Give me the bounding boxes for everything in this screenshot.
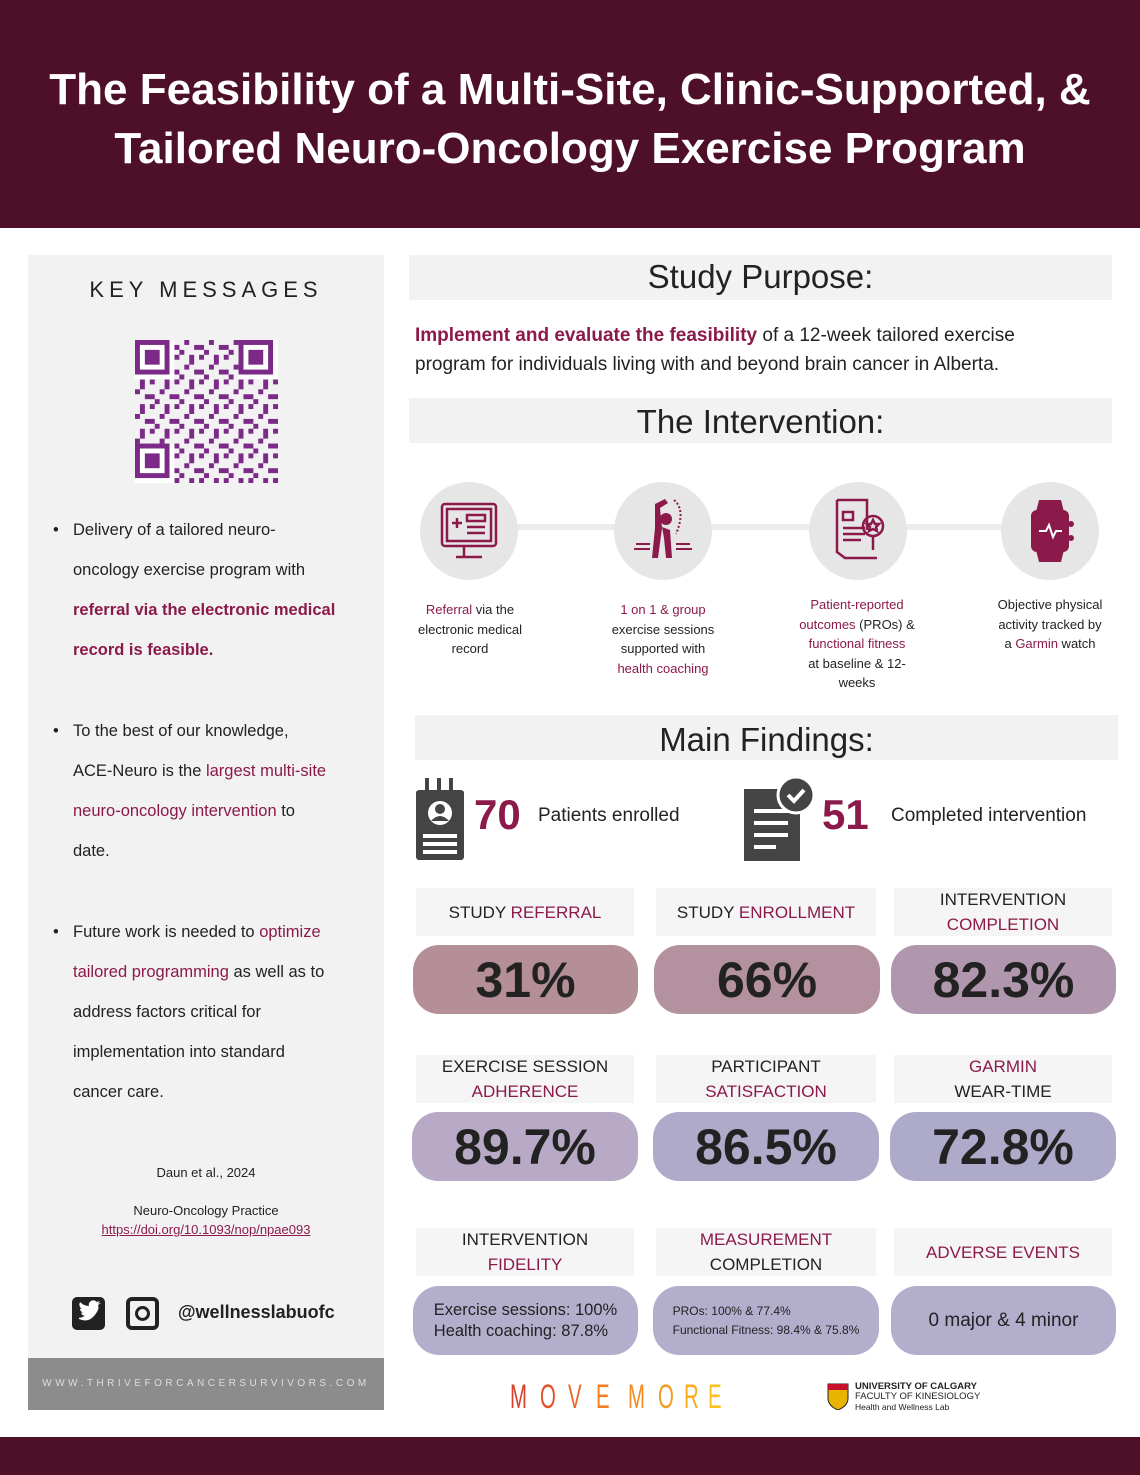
text: key messages list: To the best of our knowledge, xyxy=(73,722,289,740)
text: STUDY ENROLLMENT xyxy=(677,902,855,922)
text: key messages list: cancer care. xyxy=(73,1083,164,1101)
number 51: 51 xyxy=(822,791,869,838)
card headers row 3 xyxy=(416,1228,634,1276)
citation: Daun et al., 2024 xyxy=(156,1165,256,1180)
header banner: Tailored Neuro-Oncology Exercise Program xyxy=(114,124,1026,173)
pill: 82.3%: 82.3% xyxy=(933,952,1074,1008)
logo: university of calgary: UNIVERSITY OF CALGARY xyxy=(855,1381,977,1392)
text: sessions: 1 on 1 & group xyxy=(620,602,706,617)
text: key messages list xyxy=(53,521,335,1101)
text: PROs: at baseline & 12- xyxy=(808,656,906,670)
pill: measurement xyxy=(653,1286,879,1355)
text: garmin: activity tracked by xyxy=(998,616,1102,632)
text: SATISFACTION xyxy=(705,1082,827,1101)
pill: 86.5% xyxy=(653,1112,879,1181)
text: key messages list: Future work is needed to optimize xyxy=(73,923,321,941)
logo: university of calgary xyxy=(828,1381,980,1412)
stat: patients enrolled xyxy=(416,778,680,860)
logo: move more: O xyxy=(540,1378,556,1416)
text: INTERVENTION xyxy=(940,890,1066,909)
icon: monitor xyxy=(420,482,518,580)
icon: stretching person xyxy=(614,482,712,580)
handle: @wellnesslabuofc xyxy=(178,1302,335,1322)
text: ADVERSE EVENTS xyxy=(926,1242,1080,1262)
icon: watch xyxy=(1001,482,1099,580)
text: WEAR-TIME xyxy=(954,1082,1052,1101)
heading: main findings xyxy=(415,715,1118,760)
text: key messages list: Delivery of a tailored neuro- xyxy=(73,521,276,539)
text: sessions xyxy=(612,602,714,676)
pill: fidelity xyxy=(413,1286,638,1355)
text: key messages list: • xyxy=(53,521,59,539)
text: key messages list: implementation into standard xyxy=(73,1043,285,1061)
website bar xyxy=(28,1358,384,1410)
card headers row 1 xyxy=(416,888,634,936)
text: key messages list: referral via the electronic medical xyxy=(73,601,335,619)
pill: fidelity: Health coaching: 87.8% xyxy=(434,1322,608,1340)
text: key messages list: record is feasible. xyxy=(73,641,213,659)
pill: 89.7%: 89.7% xyxy=(454,1118,596,1174)
number 70: 70 xyxy=(474,791,521,838)
logo: move more: R xyxy=(684,1378,699,1416)
pill: fidelity: Exercise sessions: 100% xyxy=(434,1300,617,1318)
text: key messages list: ACE-Neuro is the largest multi-site xyxy=(73,762,326,780)
text: study purpose: Implement and evaluate the feasibility of a 12-week tailored exercise xyxy=(415,325,1015,346)
logo: university of calgary: FACULTY OF KINESIOLOGY xyxy=(855,1391,980,1402)
text: garmin: a Garmin watch xyxy=(1004,636,1096,651)
pill: 89.7% xyxy=(412,1112,638,1181)
text: sessions: supported with xyxy=(621,641,705,656)
logo: move more: E xyxy=(708,1378,722,1416)
text: GARMIN xyxy=(969,1057,1037,1076)
logo: university of calgary: Health and Wellness Lab xyxy=(855,1402,949,1412)
text: key messages list: address factors critical for xyxy=(73,1003,261,1021)
stat: patients enrolled: Patients enrolled xyxy=(538,805,680,826)
connector line xyxy=(470,524,1050,530)
pill: 72.8% xyxy=(890,1112,1116,1181)
icon: QR code xyxy=(135,340,278,483)
card headers row 2: EXERCISE SESSION xyxy=(442,1057,608,1076)
text: sessions: health coaching xyxy=(617,660,709,676)
pill: 66%: 66% xyxy=(717,952,817,1008)
text: key messages list: • xyxy=(53,722,59,740)
header banner xyxy=(0,0,1140,228)
icon: instagram xyxy=(126,1297,159,1330)
logo: move more: O xyxy=(658,1378,674,1416)
card headers row 3: INTERVENTION xyxy=(462,1230,588,1249)
icon: document with magnifier xyxy=(809,482,907,580)
text: PROs: outcomes (PROs) & xyxy=(799,616,915,632)
text: PROs: Patient-reported xyxy=(810,597,904,612)
text: study purpose: program for individuals living with and beyond brain cancer in Alberta. xyxy=(415,354,999,375)
citation: https://doi.org/10.1093/nop/npae093 xyxy=(102,1222,310,1237)
pill: 82.3% xyxy=(891,945,1116,1014)
pill: 31% xyxy=(413,945,638,1014)
text: COMPLETION xyxy=(947,915,1059,934)
stat: completed intervention: Completed intervention xyxy=(891,805,1086,826)
logo: move more: E xyxy=(596,1378,610,1416)
pill: 66% xyxy=(654,945,880,1014)
website bar: WWW.THRIVEFORCANCERSURVIVORS.COM xyxy=(42,1378,370,1389)
logo: move more: M xyxy=(628,1378,645,1416)
text: key messages list: oncology exercise program with xyxy=(73,561,305,579)
text: study purpose xyxy=(415,325,1015,375)
text: key messages list: • xyxy=(53,923,59,941)
text: sessions: exercise sessions xyxy=(612,622,714,636)
pill: 72.8%: 72.8% xyxy=(932,1118,1074,1174)
logo: move more: M xyxy=(510,1378,527,1416)
icon: twitter xyxy=(72,1297,105,1330)
pill: 86.5%: 86.5% xyxy=(695,1118,837,1174)
heading: main findings: Main Findings: xyxy=(659,721,874,758)
pill: measurement: Functional Fitness: 98.4% & 75.8% xyxy=(673,1322,859,1336)
footer bar xyxy=(0,1437,1140,1475)
card headers row 2: ADHERENCE xyxy=(472,1082,578,1101)
card headers row 2 xyxy=(416,1055,634,1103)
icon: badge xyxy=(416,778,464,860)
heading: study purpose: Study Purpose: xyxy=(648,258,873,295)
header banner: The Feasibility of a Multi-Site, Clinic-Supported, & xyxy=(49,65,1091,114)
icon: clipboard check xyxy=(744,778,812,861)
text: referral: record xyxy=(452,641,488,656)
text: PROs xyxy=(799,597,915,690)
text: key messages list: tailored programming as well as to xyxy=(73,963,324,981)
text: key messages list: date. xyxy=(73,842,110,860)
text: MEASUREMENT xyxy=(700,1230,832,1249)
heading: key messages: KEY MESSAGES xyxy=(89,277,323,302)
pill: adverse events: 0 major & 4 minor xyxy=(929,1310,1078,1330)
text: PROs: functional fitness xyxy=(809,636,905,651)
text: referral: electronic medical xyxy=(418,622,522,636)
heading: the intervention: The Intervention: xyxy=(637,403,884,440)
pill: measurement: PROs: 100% & 77.4% xyxy=(673,1304,791,1318)
text: PROs: weeks xyxy=(839,675,875,690)
citation: Neuro-Oncology Practice xyxy=(133,1203,279,1218)
logo: move more: V xyxy=(568,1378,582,1416)
text: garmin: Objective physical xyxy=(998,597,1102,612)
text: key messages list: neuro-oncology intervention to xyxy=(73,802,295,820)
pill: adverse events xyxy=(891,1286,1116,1355)
heading: study purpose xyxy=(409,255,1112,300)
citation xyxy=(102,1165,310,1237)
pill: 31%: 31% xyxy=(475,952,576,1008)
social handles xyxy=(72,1297,335,1330)
logo: move more xyxy=(510,1378,722,1416)
card headers row 1: STUDY REFERRAL xyxy=(449,902,601,922)
text: referral: Referral via the xyxy=(426,602,514,617)
text: referral xyxy=(418,602,522,656)
heading: the intervention xyxy=(409,398,1112,443)
stat: completed intervention xyxy=(744,778,1086,861)
panel: key messages xyxy=(28,255,384,1410)
text: garmin xyxy=(998,597,1102,651)
text: PARTICIPANT xyxy=(711,1057,821,1076)
card headers row 3: FIDELITY xyxy=(488,1255,562,1274)
text: COMPLETION xyxy=(710,1255,822,1274)
